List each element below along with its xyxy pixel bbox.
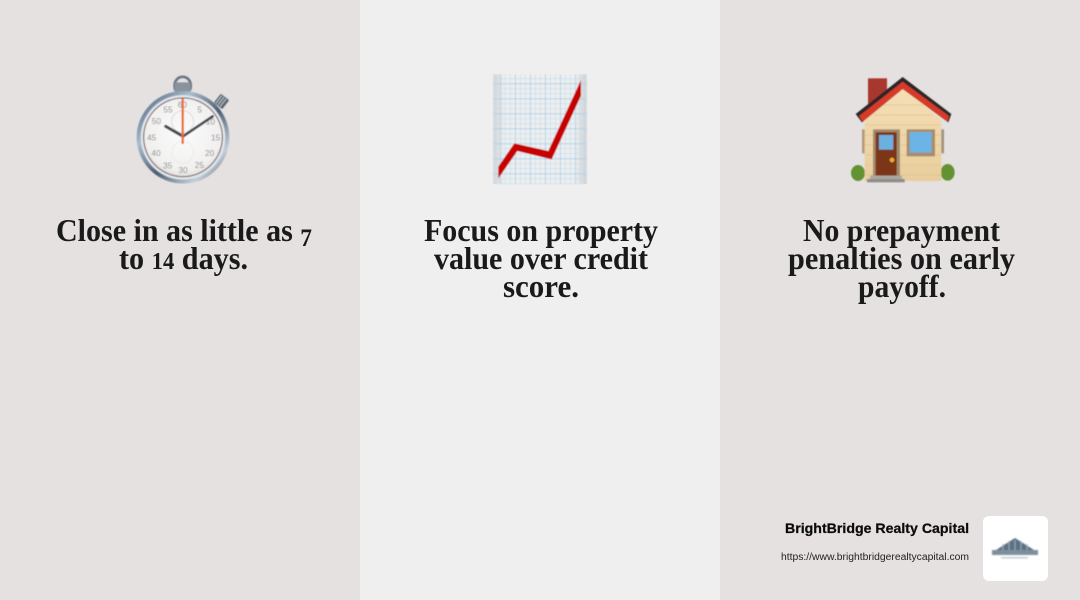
- icon: stopwatch: 20: [205, 148, 215, 158]
- heading: fast closing: to 14 days.: [119, 240, 248, 276]
- heading: no prepayment penalties: penalties on early: [788, 240, 1015, 276]
- icon: stopwatch: 5: [197, 104, 202, 114]
- panel: fast closing: [0, 0, 360, 600]
- icon: house: [851, 77, 955, 182]
- icon: stopwatch: 60: [178, 99, 187, 109]
- heading: no prepayment penalties: payoff.: [858, 268, 946, 304]
- icon: stopwatch: 40: [151, 148, 161, 158]
- icon: stopwatch: 25: [195, 160, 204, 170]
- heading: no prepayment penalties: [788, 212, 1015, 304]
- icon: rising chart: [493, 74, 587, 184]
- logo: [983, 516, 1048, 581]
- heading: property value: Focus on property: [424, 212, 658, 248]
- icon: stopwatch: 45: [147, 132, 157, 142]
- heading: fast closing: 7: [300, 225, 312, 252]
- icon: stopwatch: 15: [211, 133, 221, 143]
- icon: stopwatch: 50: [152, 116, 161, 126]
- icon: stopwatch: 55: [163, 105, 173, 115]
- heading: no prepayment penalties: No prepayment: [803, 212, 1000, 248]
- website url: https://www.brightbridgerealtycapital.com: [781, 552, 969, 563]
- company name: BrightBridge Realty Capital: [785, 520, 969, 536]
- icon: stopwatch: [137, 77, 229, 184]
- footer: company branding: [781, 516, 1048, 581]
- icon: stopwatch: 10: [206, 117, 215, 127]
- heading: fast closing: Close in as little as: [56, 212, 308, 248]
- icon: stopwatch: 35: [163, 160, 173, 170]
- heading: property value: [424, 212, 658, 304]
- heading: fast closing: [56, 212, 312, 276]
- icon: stopwatch: 30: [178, 165, 188, 175]
- panel: no prepayment penalties: [720, 0, 1080, 600]
- heading: property value: score.: [503, 268, 579, 304]
- panel: property value: [360, 0, 720, 600]
- heading: property value: value over credit: [434, 240, 648, 276]
